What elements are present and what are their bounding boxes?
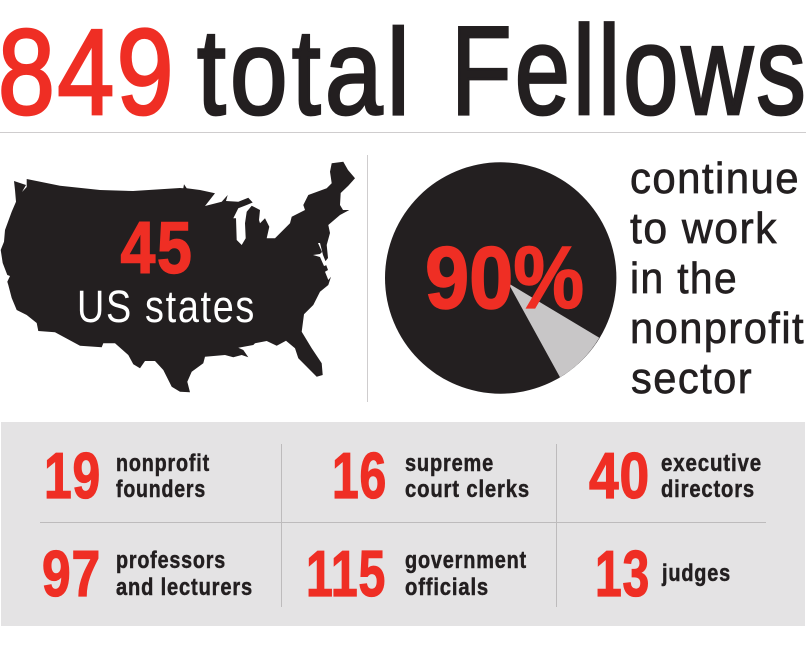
stat: 19 nonprofit founders: 19 [44, 439, 101, 512]
stat: 16 supreme court clerks: supreme [405, 450, 494, 477]
text: continue to work in the nonprofit sector: continue [630, 154, 800, 203]
stat: 13 judges [595, 537, 731, 610]
map of the United States [1, 162, 355, 392]
stat: 13 judges: 13 [595, 537, 650, 610]
stat: 40 executive directors: directors [661, 476, 755, 503]
stat: 115 government officials [306, 537, 527, 610]
text: continue to work in the nonprofit sector: to work [630, 204, 778, 253]
text: continue to work in the nonprofit sector: in the [630, 254, 738, 303]
stat: 40 executive directors [589, 439, 762, 512]
stat: 97 professors and lecturers: professors [116, 547, 226, 574]
panel: roles grid [1, 422, 805, 626]
title: 849 [0, 4, 176, 140]
stat: 19 nonprofit founders [44, 439, 210, 512]
stat: 13 judges: judges [661, 560, 731, 587]
number: 45: 45 [120, 208, 194, 289]
stat: 115 government officials: government [405, 547, 527, 574]
title: total [197, 4, 414, 140]
stat: 97 professors and lecturers: 97 [42, 537, 101, 610]
panel: US states map [1, 162, 355, 392]
stat: 19 nonprofit founders: founders [116, 476, 206, 503]
label: US states: US states [77, 281, 256, 332]
stat: 16 supreme court clerks [332, 439, 530, 512]
stat: 97 professors and lecturers [42, 537, 253, 610]
text: continue to work in the nonprofit sector [630, 154, 805, 403]
number: 90%: 90% [425, 228, 584, 327]
Chesapeake Bay [313, 243, 327, 266]
stat: 115 government officials: officials [405, 574, 489, 601]
stat: 40 executive directors: 40 [589, 439, 650, 512]
pie chart [385, 162, 616, 394]
stat: 97 professors and lecturers: and lecturers [116, 574, 253, 601]
title [0, 0, 806, 141]
text: continue to work in the nonprofit sector: sector [631, 354, 753, 403]
stat: 16 supreme court clerks: court clerks [405, 476, 530, 503]
stat: 40 executive directors: executive [661, 450, 762, 477]
stat: 19 nonprofit founders: nonprofit [116, 450, 210, 477]
stat: 115 government officials: 115 [306, 537, 386, 610]
panel: nonprofit share [385, 154, 805, 403]
stat: 16 supreme court clerks: 16 [332, 439, 387, 512]
